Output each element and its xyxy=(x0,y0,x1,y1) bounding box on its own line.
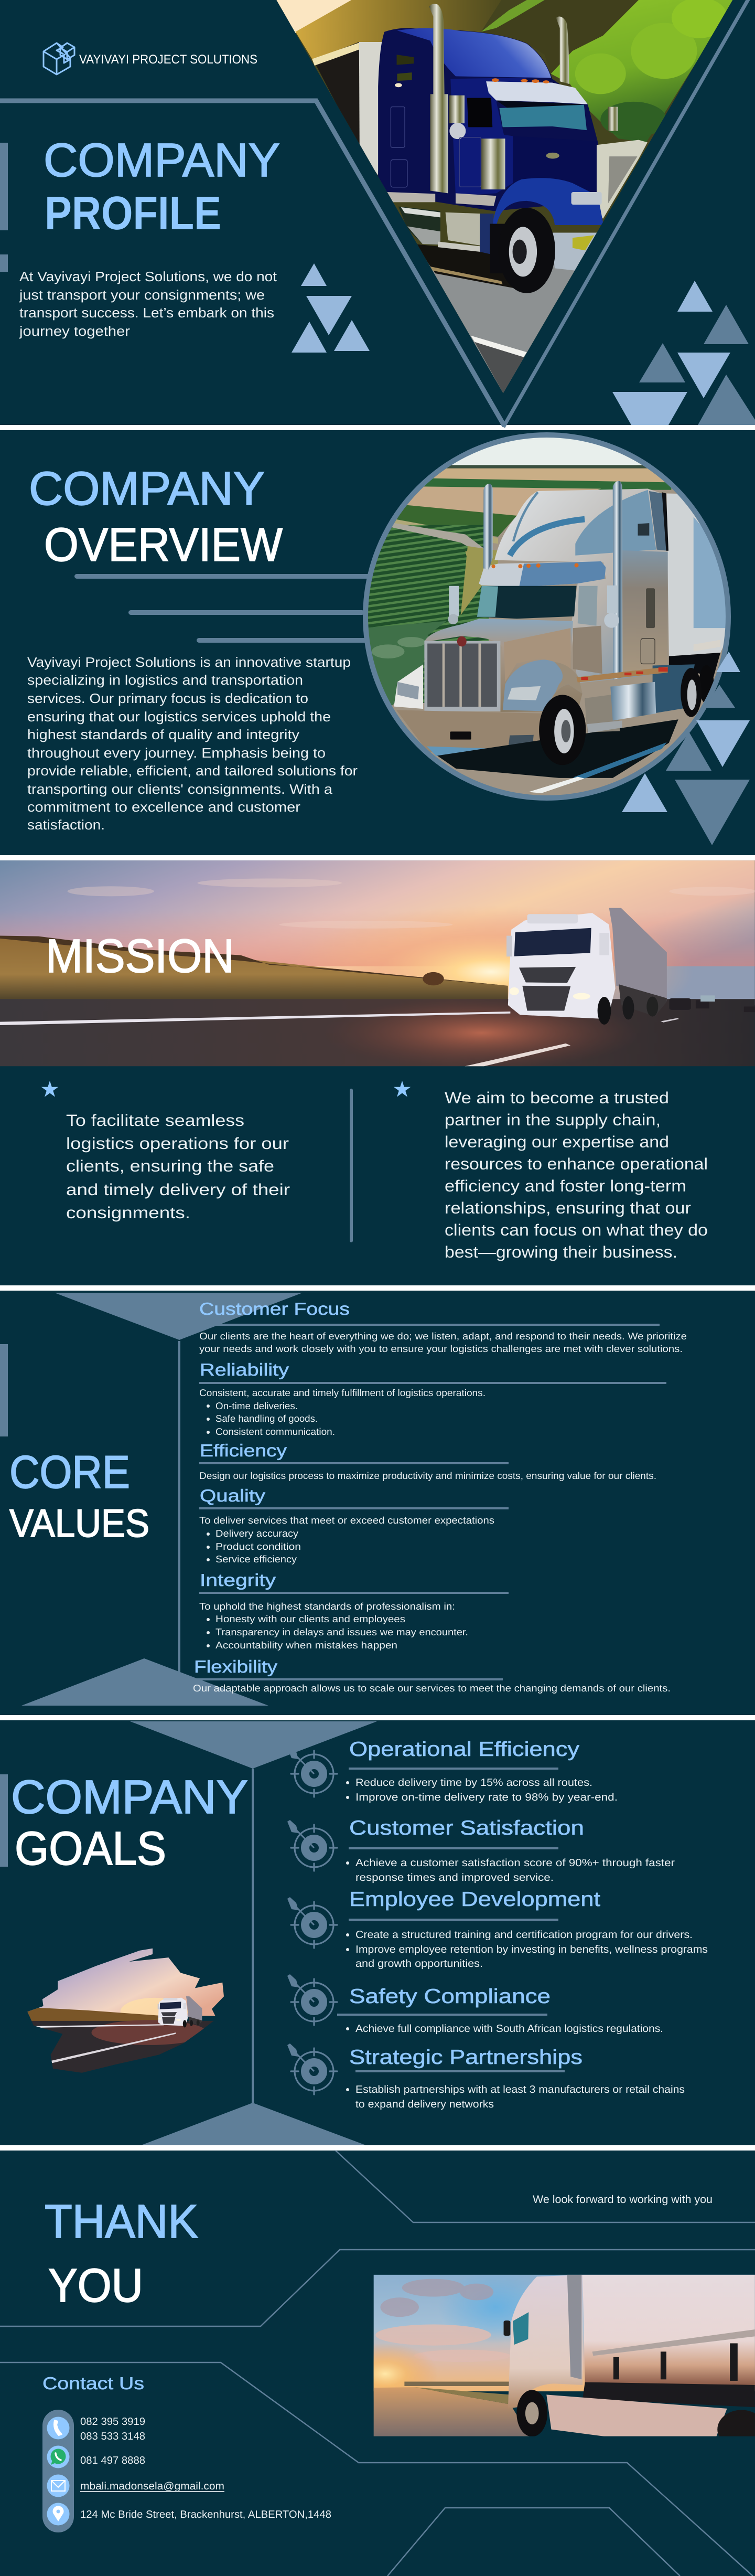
side bars xyxy=(0,143,8,272)
vision text xyxy=(445,1089,708,1261)
value: reliability: Consistent, accurate and timely fulfillment of logistics operations. xyxy=(199,1387,486,1398)
goal: safety compliance: Achieve full compliance with South African logistics regulations. xyxy=(355,2023,663,2035)
side bar xyxy=(0,1774,8,1867)
value: efficiency: Design our logistics process to maximize productivity and minimize costs, ensuring value for our clients. xyxy=(199,1470,656,1481)
heading: OVERVIEW xyxy=(44,519,283,571)
value: customer focus: Our clients are the heart of everything we do; we listen, adapt, and respond to their needs. We prioritize xyxy=(199,1330,687,1342)
icon: target 1 xyxy=(287,1746,337,1797)
heading: MISSION xyxy=(46,930,234,983)
goal: strategic partnerships: Establish partnerships with at least 3 manufacturers or retail chains xyxy=(355,2084,685,2095)
value: efficiency xyxy=(199,1441,656,1481)
heading: COMPANY xyxy=(11,1771,248,1824)
triangles cluster left xyxy=(292,263,370,353)
value: integrity xyxy=(199,1570,509,1651)
vertical line xyxy=(178,1341,180,1673)
goal: strategic partnerships: Strategic Partnerships xyxy=(349,2046,583,2069)
heading: GOALS xyxy=(15,1823,166,1875)
overview text: transporting our clients' consignments. With a xyxy=(27,781,333,797)
vision text: leveraging our expertise and xyxy=(445,1133,669,1151)
intro text: At Vayivayi Project Solutions, we do not xyxy=(19,269,277,284)
bottom triangle xyxy=(141,2103,366,2145)
goal: strategic partnerships xyxy=(346,2046,685,2110)
heading: VALUES xyxy=(9,1501,149,1545)
triangles right xyxy=(622,652,750,845)
value: integrity: To uphold the highest standards of professionalism in: xyxy=(199,1601,455,1612)
value: customer focus: Customer Focus xyxy=(199,1299,350,1318)
contact details: mbali.madonsela@gmail.com xyxy=(80,2481,224,2492)
icon: star xyxy=(394,1081,411,1097)
mission text: logistics operations for our xyxy=(66,1134,289,1153)
icon: whatsapp xyxy=(47,2446,69,2468)
value: quality: Quality xyxy=(200,1486,266,1505)
chevron outline xyxy=(0,0,750,427)
icon: target 5 xyxy=(287,2043,337,2094)
photo: truck at sunset xyxy=(0,860,755,1069)
vision text: efficiency and foster long-term xyxy=(445,1177,686,1195)
overview text: services. Our primary focus is dedication to xyxy=(27,690,308,706)
overview text: highest standards of quality and integrity xyxy=(27,727,299,742)
vision text: best—growing their business. xyxy=(445,1243,677,1261)
photo: brush stroke truck xyxy=(27,1949,224,2073)
value: flexibility: Our adaptable approach allows us to scale our services to meet the changing demands of our clients. xyxy=(193,1683,671,1694)
speed bars xyxy=(74,574,371,643)
contact details: 083 533 3148 xyxy=(80,2431,145,2442)
value: quality: Service efficiency xyxy=(215,1553,297,1564)
mission text: consignments. xyxy=(66,1204,190,1222)
overview text: specializing in logistics and transportation xyxy=(27,672,303,688)
side bar xyxy=(0,1344,8,1436)
icon: star xyxy=(41,1081,58,1097)
goal: customer satisfaction xyxy=(346,1817,675,1883)
heading xyxy=(11,1771,248,1875)
value: flexibility: Flexibility xyxy=(194,1657,278,1676)
overview text: Vayivayi Project Solutions is an innovative startup xyxy=(27,654,351,670)
value: integrity: Transparency in delays and issues we may encounter. xyxy=(215,1626,468,1637)
intro text: journey together xyxy=(19,323,130,339)
goal: customer satisfaction: Customer Satisfaction xyxy=(349,1817,584,1839)
value: quality: Product condition xyxy=(215,1541,301,1552)
vision text: relationships, ensuring that our xyxy=(445,1199,691,1217)
goal: safety compliance xyxy=(337,1985,663,2035)
overview text: ensuring that our logistics services uphold the xyxy=(27,709,331,725)
goal: employee development: Create a structured training and certification program for our drivers. xyxy=(355,1929,693,1941)
goal: customer satisfaction: response times and improved service. xyxy=(355,1872,554,1883)
heading xyxy=(9,1446,149,1545)
goal: strategic partnerships: to expand delivery networks xyxy=(355,2099,494,2110)
value: reliability: Safe handling of goods. xyxy=(215,1413,318,1424)
contact heading: Contact Us xyxy=(42,2373,144,2393)
value: reliability: Reliability xyxy=(200,1360,289,1379)
icon: location pin xyxy=(47,2503,69,2526)
overview text xyxy=(27,654,358,833)
overview text: satisfaction. xyxy=(27,817,105,833)
goal: operational efficiency: Reduce delivery time by 15% across all routes. xyxy=(355,1777,592,1789)
value: quality: To deliver services that meet or exceed customer expectations xyxy=(199,1515,494,1526)
heading: THANK xyxy=(45,2196,198,2248)
top triangle xyxy=(55,1293,303,1340)
goal: operational efficiency xyxy=(346,1738,618,1803)
value: flexibility xyxy=(192,1657,671,1694)
intro text: transport success. Let’s embark on this xyxy=(19,305,274,321)
logo: cube icon xyxy=(44,43,74,74)
photo: truck side view xyxy=(373,2275,755,2436)
photo: blue truck in triangle xyxy=(273,0,735,397)
goal: operational efficiency: Operational Efficiency xyxy=(349,1738,580,1761)
panel: thank you and contact xyxy=(0,2151,755,2576)
value: reliability xyxy=(199,1360,666,1437)
value: reliability: Consistent communication. xyxy=(215,1426,335,1437)
panel: company goals xyxy=(0,1720,755,2145)
contact details: 082 395 3919 xyxy=(80,2416,145,2428)
heading xyxy=(44,134,280,240)
vertical line xyxy=(252,1769,254,2103)
vision text: resources to enhance operational xyxy=(445,1155,708,1173)
circuit lines xyxy=(0,2151,755,2576)
value: customer focus xyxy=(199,1299,687,1354)
goal icons: targets xyxy=(287,1746,337,2094)
heading: COMPANY xyxy=(44,134,280,187)
panel: core values xyxy=(0,1291,755,1715)
panel: mission xyxy=(0,860,755,1285)
contact details: 124 Mc Bride Street, Brackenhurst, ALBERTON,1448 xyxy=(80,2509,331,2520)
tagline: We look forward to working with you xyxy=(533,2194,713,2206)
heading: CORE xyxy=(9,1446,130,1498)
heading xyxy=(45,2196,198,2312)
mission text xyxy=(66,1111,290,1222)
goal: safety compliance: Safety Compliance xyxy=(349,1985,551,2008)
goal: employee development xyxy=(346,1888,708,1970)
contact icon pill xyxy=(42,2410,74,2532)
value: efficiency: Efficiency xyxy=(200,1441,287,1460)
contact details: 081 497 8888 xyxy=(80,2455,145,2466)
intro text: just transport your consignments; we xyxy=(19,287,265,303)
value: quality xyxy=(199,1486,509,1564)
value: integrity: Integrity xyxy=(200,1570,276,1590)
contact details xyxy=(80,2416,331,2520)
overview text: commitment to excellence and customer xyxy=(27,799,300,815)
value: integrity: Honesty with our clients and employees xyxy=(215,1613,405,1624)
icon: mail xyxy=(47,2474,69,2497)
vision text: We aim to become a trusted xyxy=(445,1089,669,1107)
mission text: and timely delivery of their xyxy=(66,1180,290,1199)
heading: COMPANY xyxy=(29,463,265,515)
goal: employee development: Improve employee retention by investing in benefits, wellness programs xyxy=(355,1944,708,1955)
value: integrity: Accountability when mistakes happen xyxy=(215,1640,397,1651)
logo text: VAYIVAYI PROJECT SOLUTIONS xyxy=(79,52,257,67)
photo ring xyxy=(365,435,728,798)
value: quality: Delivery accuracy xyxy=(215,1528,299,1539)
value: reliability: On-time deliveries. xyxy=(215,1400,298,1411)
mission text: clients, ensuring the safe xyxy=(66,1157,274,1175)
overview text: provide reliable, efficient, and tailored solutions for xyxy=(27,763,358,779)
vision text: clients can focus on what they do xyxy=(445,1221,708,1239)
icon: target 2 xyxy=(287,1820,337,1871)
icon: phone xyxy=(47,2417,69,2440)
value: customer focus: your needs and work closely with you to ensure your logistics challenges are met with clever solutions. xyxy=(199,1343,683,1354)
vision text: partner in the supply chain, xyxy=(445,1111,661,1129)
heading: PROFILE xyxy=(45,187,221,240)
intro text xyxy=(19,269,277,339)
triangles cluster right xyxy=(612,281,755,425)
photo: silver truck in circle xyxy=(362,431,737,806)
goal: employee development: Employee Development xyxy=(349,1888,600,1911)
heading xyxy=(29,463,283,571)
bottom triangle xyxy=(21,1658,268,1706)
icon: target 3 xyxy=(287,1897,337,1948)
heading: YOU xyxy=(48,2260,143,2312)
mission text: To facilitate seamless xyxy=(66,1111,244,1130)
panel: company overview xyxy=(0,430,755,855)
overview text: throughout every journey. Emphasis being to xyxy=(27,745,326,761)
icon: target 4 xyxy=(287,1974,337,2025)
panel: company profile cover xyxy=(0,0,755,427)
goal: employee development: and growth opportunities. xyxy=(355,1958,483,1970)
divider xyxy=(350,1089,353,1242)
top triangle xyxy=(130,1721,377,1769)
goal: customer satisfaction: Achieve a customer satisfaction score of 90%+ through faster xyxy=(355,1857,675,1869)
goal: operational efficiency: Improve on-time delivery rate to 98% by year-end. xyxy=(355,1792,618,1803)
